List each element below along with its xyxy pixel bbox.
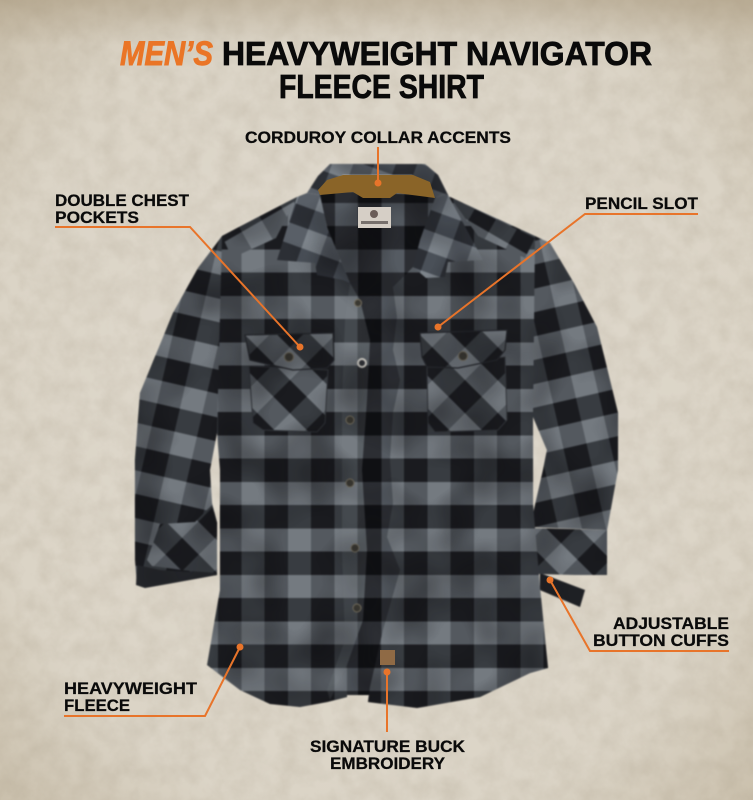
right collar leaf — [413, 193, 483, 278]
collar back — [307, 164, 447, 198]
left front panel — [207, 195, 370, 707]
buck embroidery patch — [380, 650, 395, 665]
neck label — [358, 207, 391, 228]
left cuff — [147, 505, 217, 573]
callout: heavyweight fleece: FLEECE — [64, 697, 130, 715]
callout: corduroy collar accents — [245, 129, 511, 186]
left sleeve — [135, 236, 238, 588]
snap button — [358, 359, 366, 367]
left collar leaf — [277, 193, 350, 283]
callout: pencil slot: PENCIL SLOT — [585, 195, 698, 213]
right sleeve — [520, 236, 618, 607]
right chest pocket — [420, 330, 507, 432]
callout: adjustable button cuffs: BUTTON CUFFS — [593, 632, 729, 650]
corduroy collar accent — [318, 175, 435, 198]
right yoke — [450, 197, 535, 258]
left yoke — [222, 197, 297, 258]
callout: signature buck embroidery: EMBROIDERY — [330, 755, 445, 773]
callout: double chest pockets — [55, 192, 304, 350]
callout: signature buck embroidery: SIGNATURE BUCK — [310, 738, 465, 756]
callout: heavyweight fleece — [64, 644, 244, 716]
callout: double chest pockets: DOUBLE CHEST — [55, 192, 189, 210]
title: MEN’S — [120, 35, 213, 73]
left chest pocket — [245, 333, 334, 432]
callout: signature buck embroidery — [310, 668, 465, 773]
callout: adjustable button cuffs: ADJUSTABLE — [613, 615, 729, 633]
shirt interior lining — [318, 190, 440, 695]
right cuff — [513, 528, 607, 575]
title: HEAVYWEIGHT NAVIGATOR — [222, 35, 652, 72]
callout: adjustable button cuffs — [546, 576, 729, 651]
callout: corduroy collar accents: CORDUROY COLLAR ACCENTS — [245, 129, 511, 147]
shirt illustration — [135, 164, 618, 708]
buttons — [284, 300, 468, 612]
right front panel — [368, 197, 548, 708]
callout: pencil slot — [434, 195, 698, 330]
title — [120, 35, 652, 105]
callout: heavyweight fleece: HEAVYWEIGHT — [64, 680, 197, 698]
title: FLEECE SHIRT — [279, 68, 484, 105]
callout: double chest pockets: POCKETS — [55, 209, 139, 227]
